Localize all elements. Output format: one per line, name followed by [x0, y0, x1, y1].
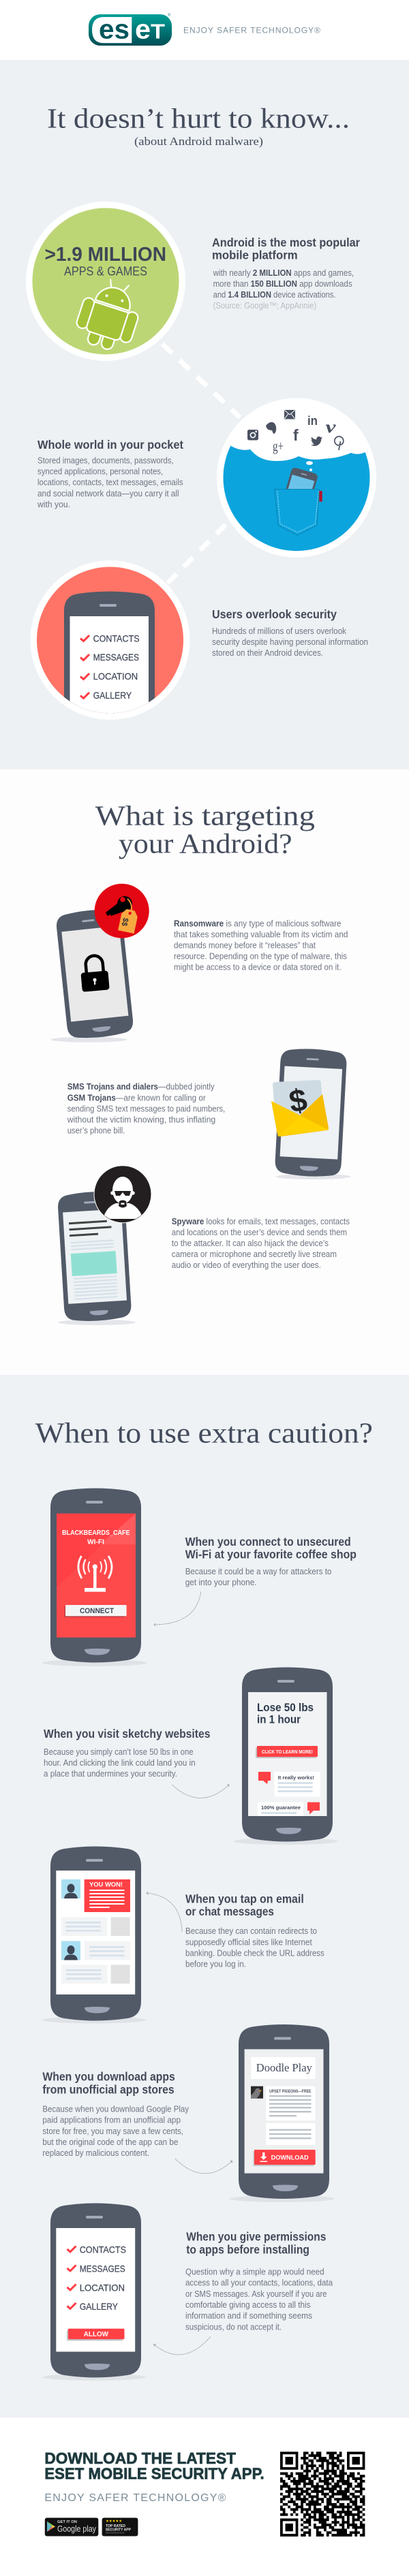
icon: pocket	[275, 489, 322, 535]
red message: you won	[85, 1879, 130, 1912]
title: what is targeting	[95, 800, 315, 859]
text: wifi: Because it could be a way for attackers to	[185, 1567, 331, 1576]
phone: chat messages	[42, 1847, 146, 2024]
icon: envelope	[271, 1094, 329, 1136]
text: permissions: comfortable giving access to all this	[185, 2300, 310, 2310]
text: ransomware: resource. Depending on the type of malware, this	[174, 952, 347, 961]
red key badge	[95, 884, 149, 938]
text: chat messages: When you tap on email	[185, 1892, 304, 1905]
testimonial 1	[258, 1772, 320, 1796]
phone: permissions	[42, 2204, 146, 2381]
water	[224, 445, 369, 552]
text: ransomware: that takes something valuable from its victim and	[174, 930, 348, 940]
ad headline: Lose 50 lbs	[257, 1701, 314, 1714]
text: unofficial app stores: from unofficial app stores	[42, 2082, 175, 2096]
icon: padlock	[80, 955, 110, 992]
button: download	[254, 2150, 316, 2166]
text: permissions: information and if something seems	[185, 2311, 312, 2321]
text: ransomware: demands money before it “releases” that	[174, 941, 316, 951]
text: permissions: access to all your contacts, locations, data	[185, 2278, 333, 2288]
button: learn more	[256, 1746, 318, 1758]
text: chat messages: or chat messages	[185, 1905, 274, 1918]
text: permissions: to apps before installing	[186, 2243, 309, 2257]
text: wifi: When you connect to unsecured	[185, 1535, 351, 1548]
icon: instagram	[247, 430, 258, 440]
text: sketchy websites: Because you simply can’t lose 50 lbs in one	[44, 1747, 194, 1757]
text: whole world: locations, contacts, text messages, emails	[37, 478, 183, 488]
text: unofficial app stores: store for free, you may save a few cents,	[42, 2127, 183, 2136]
permissions checklist: GALLERY	[80, 2301, 119, 2312]
icons: social networks	[247, 410, 344, 454]
QR code	[280, 2451, 365, 2537]
store name	[251, 2057, 316, 2079]
permissions checklist: LOCATION	[80, 2282, 125, 2293]
icon: android robot	[72, 274, 147, 355]
text: spyware: and locations on the user’s device and sends them	[172, 1228, 347, 1237]
text: SMS trojans: user’s phone bill.	[67, 1126, 125, 1136]
text: android popular: and 1.4 BILLION device activations.	[213, 290, 336, 300]
phone	[55, 907, 134, 1040]
title: when to use extra caution: When to use extra caution?	[35, 1418, 373, 1449]
phone: unofficial store	[230, 2024, 335, 2202]
avatar	[61, 1879, 80, 1898]
text: wifi	[185, 1535, 357, 1587]
button: allow	[67, 2329, 124, 2341]
section background: about Android malware	[0, 60, 409, 769]
store name: Doodle Play	[256, 2061, 313, 2074]
text: ransomware	[174, 919, 348, 972]
ransomware illustration	[50, 884, 149, 1043]
footer call to action: DOWNLOAD THE LATEST	[44, 2449, 237, 2467]
text: permissions	[185, 2229, 333, 2332]
phone: sketchy website	[234, 1667, 338, 1845]
text: unofficial app stores: Because when you download Google Play	[42, 2105, 190, 2114]
badge: top rated: ★★★★★	[106, 2519, 122, 2524]
circle: world in pocket	[217, 398, 382, 558]
badge: top rated	[102, 2518, 138, 2536]
text: spyware: audio or video of everything the user does.	[172, 1260, 321, 1270]
permissions checklist: CONTACTS	[80, 2244, 126, 2255]
text: android popular: (Source: Google™; AppAnnie)	[213, 301, 316, 311]
testimonial 2	[258, 1802, 320, 1816]
text: permissions: When you give permissions	[186, 2229, 327, 2243]
button: download: DOWNLOAD	[271, 2154, 309, 2161]
icon: letter with dollar	[273, 1080, 322, 1119]
text: whole world: Whole world in your pocket	[37, 438, 183, 451]
icon: antenna	[78, 1556, 112, 1592]
text: wifi: Wi-Fi at your favorite coffee shop	[185, 1547, 357, 1561]
text: spyware: camera or microphone and secretly live stream	[172, 1250, 337, 1259]
text: sketchy websites: a place that undermines your security.	[44, 1769, 177, 1779]
circle: apps and games: APPS & GAMES	[64, 264, 147, 278]
tagline: ENJOY SAFER TECHNOLOGY®	[183, 26, 321, 35]
icon: letter with dollar: $	[286, 1081, 309, 1119]
badge: google play: Google play	[57, 2524, 96, 2534]
message row 1	[61, 1917, 130, 1936]
text: SMS trojans: sending SMS text messages to paid numbers,	[67, 1104, 225, 1114]
icon: phone in pocket	[283, 467, 318, 508]
text: users overlook: security despite having personal information	[212, 637, 368, 647]
thought bubbles	[306, 461, 313, 471]
text: whole world: synced applications, personal notes,	[37, 467, 163, 477]
icon: price tag: $$	[120, 917, 130, 927]
text: spyware: Spyware looks for emails, text messages, contacts	[172, 1217, 350, 1226]
icon: google plus: g+	[273, 438, 284, 454]
header band	[0, 0, 409, 60]
app reviews	[266, 2123, 316, 2145]
text: users overlook: Hundreds of millions of users overlook	[212, 626, 347, 636]
ESET logo: T	[151, 20, 165, 44]
text: ransomware: might be access to a device or data stored on it.	[174, 963, 342, 972]
arrow: unofficial app stores	[175, 2159, 232, 2174]
text: android popular: more than 150 BILLION app downloads	[213, 279, 352, 289]
footer band	[0, 2417, 409, 2576]
text: chat messages: supposedly official sites like Internet	[185, 1937, 312, 1947]
title: (about Android malware)	[134, 135, 263, 148]
text: sketchy websites	[44, 1727, 211, 1779]
title: It doesn’t hurt to know...	[47, 102, 350, 133]
phone with checklist	[64, 591, 155, 714]
arrow: chat messages	[147, 1892, 182, 1932]
icon: pigeon	[251, 2086, 263, 2099]
footer call to action: ESET MOBILE SECURITY APP.	[44, 2465, 264, 2483]
icon: key	[106, 896, 132, 916]
badge: top rated: TOP RATED	[106, 2524, 125, 2528]
text: users overlook: Users overlook security	[212, 607, 337, 621]
app description	[266, 2086, 316, 2120]
text: permissions: or SMS messages. Ask yourself if you are	[185, 2289, 327, 2299]
text: unofficial app stores: When you download apps	[42, 2070, 175, 2084]
spy badge	[94, 1165, 151, 1223]
circle: users overlook security	[30, 560, 190, 720]
icon: evernote	[266, 422, 276, 434]
ESET logo: e	[135, 15, 151, 45]
text: android popular: with nearly 2 MILLION apps and games,	[213, 268, 354, 278]
testimonial 2: 100% guarantee	[261, 1804, 301, 1811]
icon: vimeo: v	[326, 418, 337, 436]
button: learn more: CLICK TO LEARN MORE!	[262, 1750, 313, 1755]
SMS trojan illustration	[271, 1047, 351, 1179]
text: wifi: get into your phone.	[185, 1578, 257, 1587]
button: connect	[64, 1605, 127, 1617]
badge: top rated: ON GOOGLE PLAY	[106, 2532, 125, 2534]
section background: targeting	[0, 769, 409, 1375]
text: android popular	[212, 236, 360, 311]
testimonial 1: It really works!	[278, 1775, 314, 1781]
text: unofficial app stores	[42, 2070, 190, 2158]
title	[47, 102, 350, 148]
title: what is targeting: your Android?	[119, 828, 292, 859]
text: SMS trojans: SMS Trojans and dialers—dubbed jointly	[67, 1082, 215, 1092]
checklist: MESSAGES	[93, 652, 139, 663]
article on screen	[69, 1220, 119, 1300]
text: whole world: Stored images, documents, passwords,	[37, 456, 174, 466]
text: SMS trojans: without the victim knowing, thus inflating	[67, 1115, 215, 1125]
circle: apps and games	[26, 202, 185, 361]
ad headline: in 1 hour	[257, 1713, 301, 1726]
text: SMS trojans	[67, 1082, 225, 1136]
section background: extra caution	[0, 1375, 409, 2417]
text: chat messages: Because they can contain redirects to	[185, 1926, 317, 1936]
icon: linkedin: in	[307, 413, 318, 428]
button: connect: CONNECT	[80, 1607, 114, 1615]
text: permissions: Question why a simple app would need	[185, 2268, 324, 2277]
arrow: permissions	[154, 2336, 211, 2355]
screen	[57, 1514, 136, 1638]
text: whole world: with you.	[37, 500, 70, 509]
title: what is targeting: What is targeting	[95, 800, 315, 831]
text: spyware	[172, 1217, 350, 1270]
text: whole world: and social network data—you carry it all	[37, 489, 179, 498]
message row 3	[61, 1965, 130, 1984]
badge: google play	[45, 2518, 98, 2536]
red message: you won: YOU WON!	[89, 1881, 123, 1888]
text: android popular: mobile platform	[212, 248, 298, 261]
text: chat messages	[185, 1892, 324, 1969]
footer call to action	[44, 2449, 264, 2504]
text: chat messages: before you log in.	[185, 1960, 246, 1969]
permissions checklist	[67, 2244, 126, 2312]
network name: WI-FI	[87, 1538, 104, 1546]
text: ransomware: Ransomware is any type of malicious software	[174, 919, 342, 929]
ESET logo: es	[99, 15, 130, 45]
badge: top rated: SECURITY APP	[106, 2528, 132, 2532]
text: users overlook: stored on their Android devices.	[212, 648, 323, 658]
spyware illustration	[57, 1165, 152, 1325]
network name	[62, 1529, 130, 1546]
text: users overlook	[212, 607, 368, 658]
icon: pinterest	[335, 436, 344, 450]
checklist: CONTACTS	[93, 633, 140, 644]
text: SMS trojans: GSM Trojans—are known for calling or	[67, 1094, 206, 1103]
ESET logo	[89, 13, 172, 46]
text: sketchy websites: When you visit sketchy websites	[44, 1727, 211, 1740]
phone: wifi	[42, 1489, 147, 1666]
badge: google play: GET IT ON	[57, 2520, 77, 2524]
checklist: GALLERY	[93, 690, 132, 701]
text: whole world	[37, 438, 183, 509]
dashed connector green to blue	[162, 344, 240, 417]
text: unofficial app stores: paid applications from an unofficial app	[42, 2116, 181, 2125]
circle: apps and games: >1.9 MILLION	[45, 244, 166, 266]
text: spyware: to the attacker. It can also hijack the device’s	[172, 1239, 329, 1248]
text: permissions: suspicious, do not accept it.	[185, 2322, 282, 2332]
footer call to action: ENJOY SAFER TECHNOLOGY®	[44, 2492, 226, 2504]
permissions checklist: MESSAGES	[80, 2263, 125, 2274]
phone	[57, 1190, 132, 1323]
dashed connector blue to coral	[167, 524, 226, 584]
phone	[275, 1047, 347, 1178]
network name: BLACKBEARDS_CAFE	[62, 1529, 130, 1537]
text: android popular: Android is the most popular	[212, 236, 360, 249]
text: unofficial app stores: replaced by malicious content.	[42, 2148, 149, 2158]
text: sketchy websites: hour. And clicking the link could land you in	[44, 1758, 196, 1768]
arrow: sketchy websites	[172, 1785, 229, 1798]
text: chat messages: banking. Double check the URL address	[185, 1948, 324, 1958]
arrow: wifi	[154, 1592, 201, 1626]
ESET logo: ®	[168, 13, 171, 18]
icon: facebook: f	[293, 426, 299, 444]
checklist: LOCATION	[93, 671, 138, 682]
icon: twitter	[311, 436, 322, 446]
checklist	[80, 633, 140, 701]
ad headline	[257, 1701, 314, 1726]
app description: UPSET PIGEONS—FREE	[269, 2090, 311, 2094]
button: allow: ALLOW	[84, 2330, 108, 2338]
message row 2	[61, 1941, 130, 1960]
text: unofficial app stores: but the original code of the app can be	[42, 2137, 178, 2147]
icon: mail	[284, 410, 295, 419]
